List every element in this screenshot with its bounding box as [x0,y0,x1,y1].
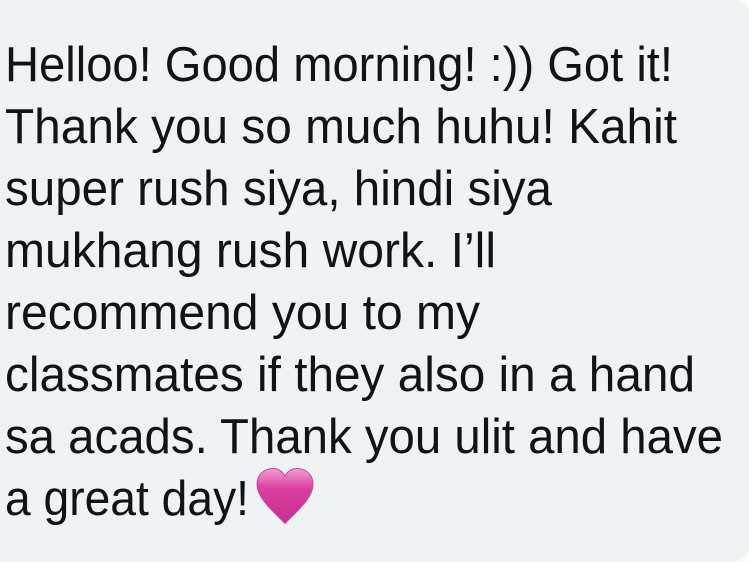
message text: recommend you to my [5,286,480,340]
card corner: bottom right [735,551,749,562]
message text: Thank you so much huhu! Kahit [5,100,677,154]
icon: pink heart [257,468,313,524]
message text: mukhang rush work. I’ll [5,224,496,278]
message text: super rush siya, hindi siya [5,162,553,216]
message text: Helloo! Good morning! :)) Got it! [5,38,673,92]
message text: a great day! [5,472,249,526]
message text: sa acads. Thank you ulit and have [5,410,723,464]
card corner: top right [738,0,749,9]
message text: classmates if they also in a hand [5,348,695,402]
